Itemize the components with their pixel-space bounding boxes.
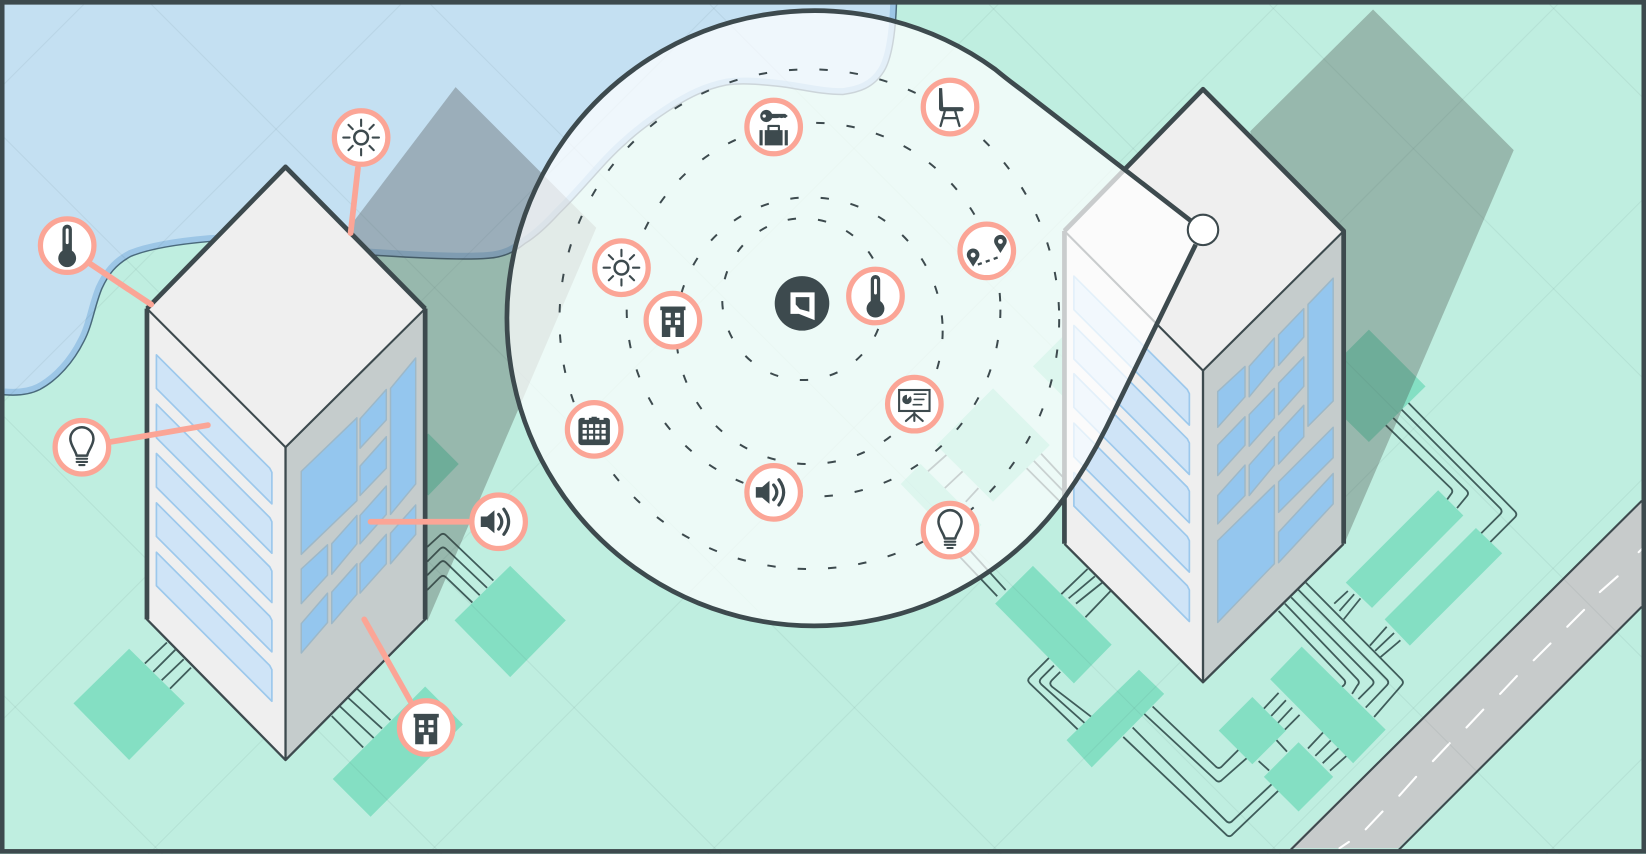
right building: right wall windows — [1218, 278, 1333, 623]
road — [1290, 501, 1644, 850]
wires: left building — [145, 534, 493, 747]
icon: thermometer callout — [40, 219, 94, 272]
shadow: left building — [346, 87, 596, 621]
icon: presentation board — [888, 377, 941, 431]
right building — [1064, 89, 1344, 682]
icon: route pins — [960, 224, 1014, 278]
lens knob — [1188, 215, 1218, 245]
icon: thermometer — [849, 269, 902, 323]
left building: roof — [147, 167, 425, 447]
water area — [4, 4, 896, 395]
right building: roof — [1064, 89, 1344, 371]
shadow: right building — [1250, 9, 1514, 543]
icon: light bulb callout — [55, 420, 109, 474]
icon: sun callout — [334, 111, 388, 164]
lens outline — [507, 11, 1196, 626]
icon: calendar — [567, 403, 621, 456]
right building: left wall windows — [1074, 276, 1189, 621]
central logo — [775, 276, 829, 331]
icon: chair — [923, 80, 977, 134]
icon: building — [646, 293, 700, 347]
dashed orbit rings — [560, 69, 1059, 569]
right building: right wall — [1203, 231, 1344, 682]
icon: speaker — [747, 466, 800, 519]
icon: speaker callout — [472, 495, 525, 549]
icon: sun — [595, 241, 648, 294]
magnifier lens — [507, 11, 1196, 626]
ground pads — [73, 310, 1502, 817]
left building: left wall — [147, 309, 286, 760]
leader lines — [88, 168, 470, 701]
icon: key and suitcase — [747, 100, 800, 154]
left building: right wall windows — [301, 358, 416, 653]
right building: left wall — [1064, 231, 1203, 682]
icon: building callout — [399, 701, 453, 754]
left building: left wall windows — [156, 355, 272, 701]
wires: right building network — [928, 402, 1516, 836]
icon: light bulb — [923, 503, 977, 557]
left building — [147, 167, 425, 760]
left building: right wall — [286, 309, 425, 760]
